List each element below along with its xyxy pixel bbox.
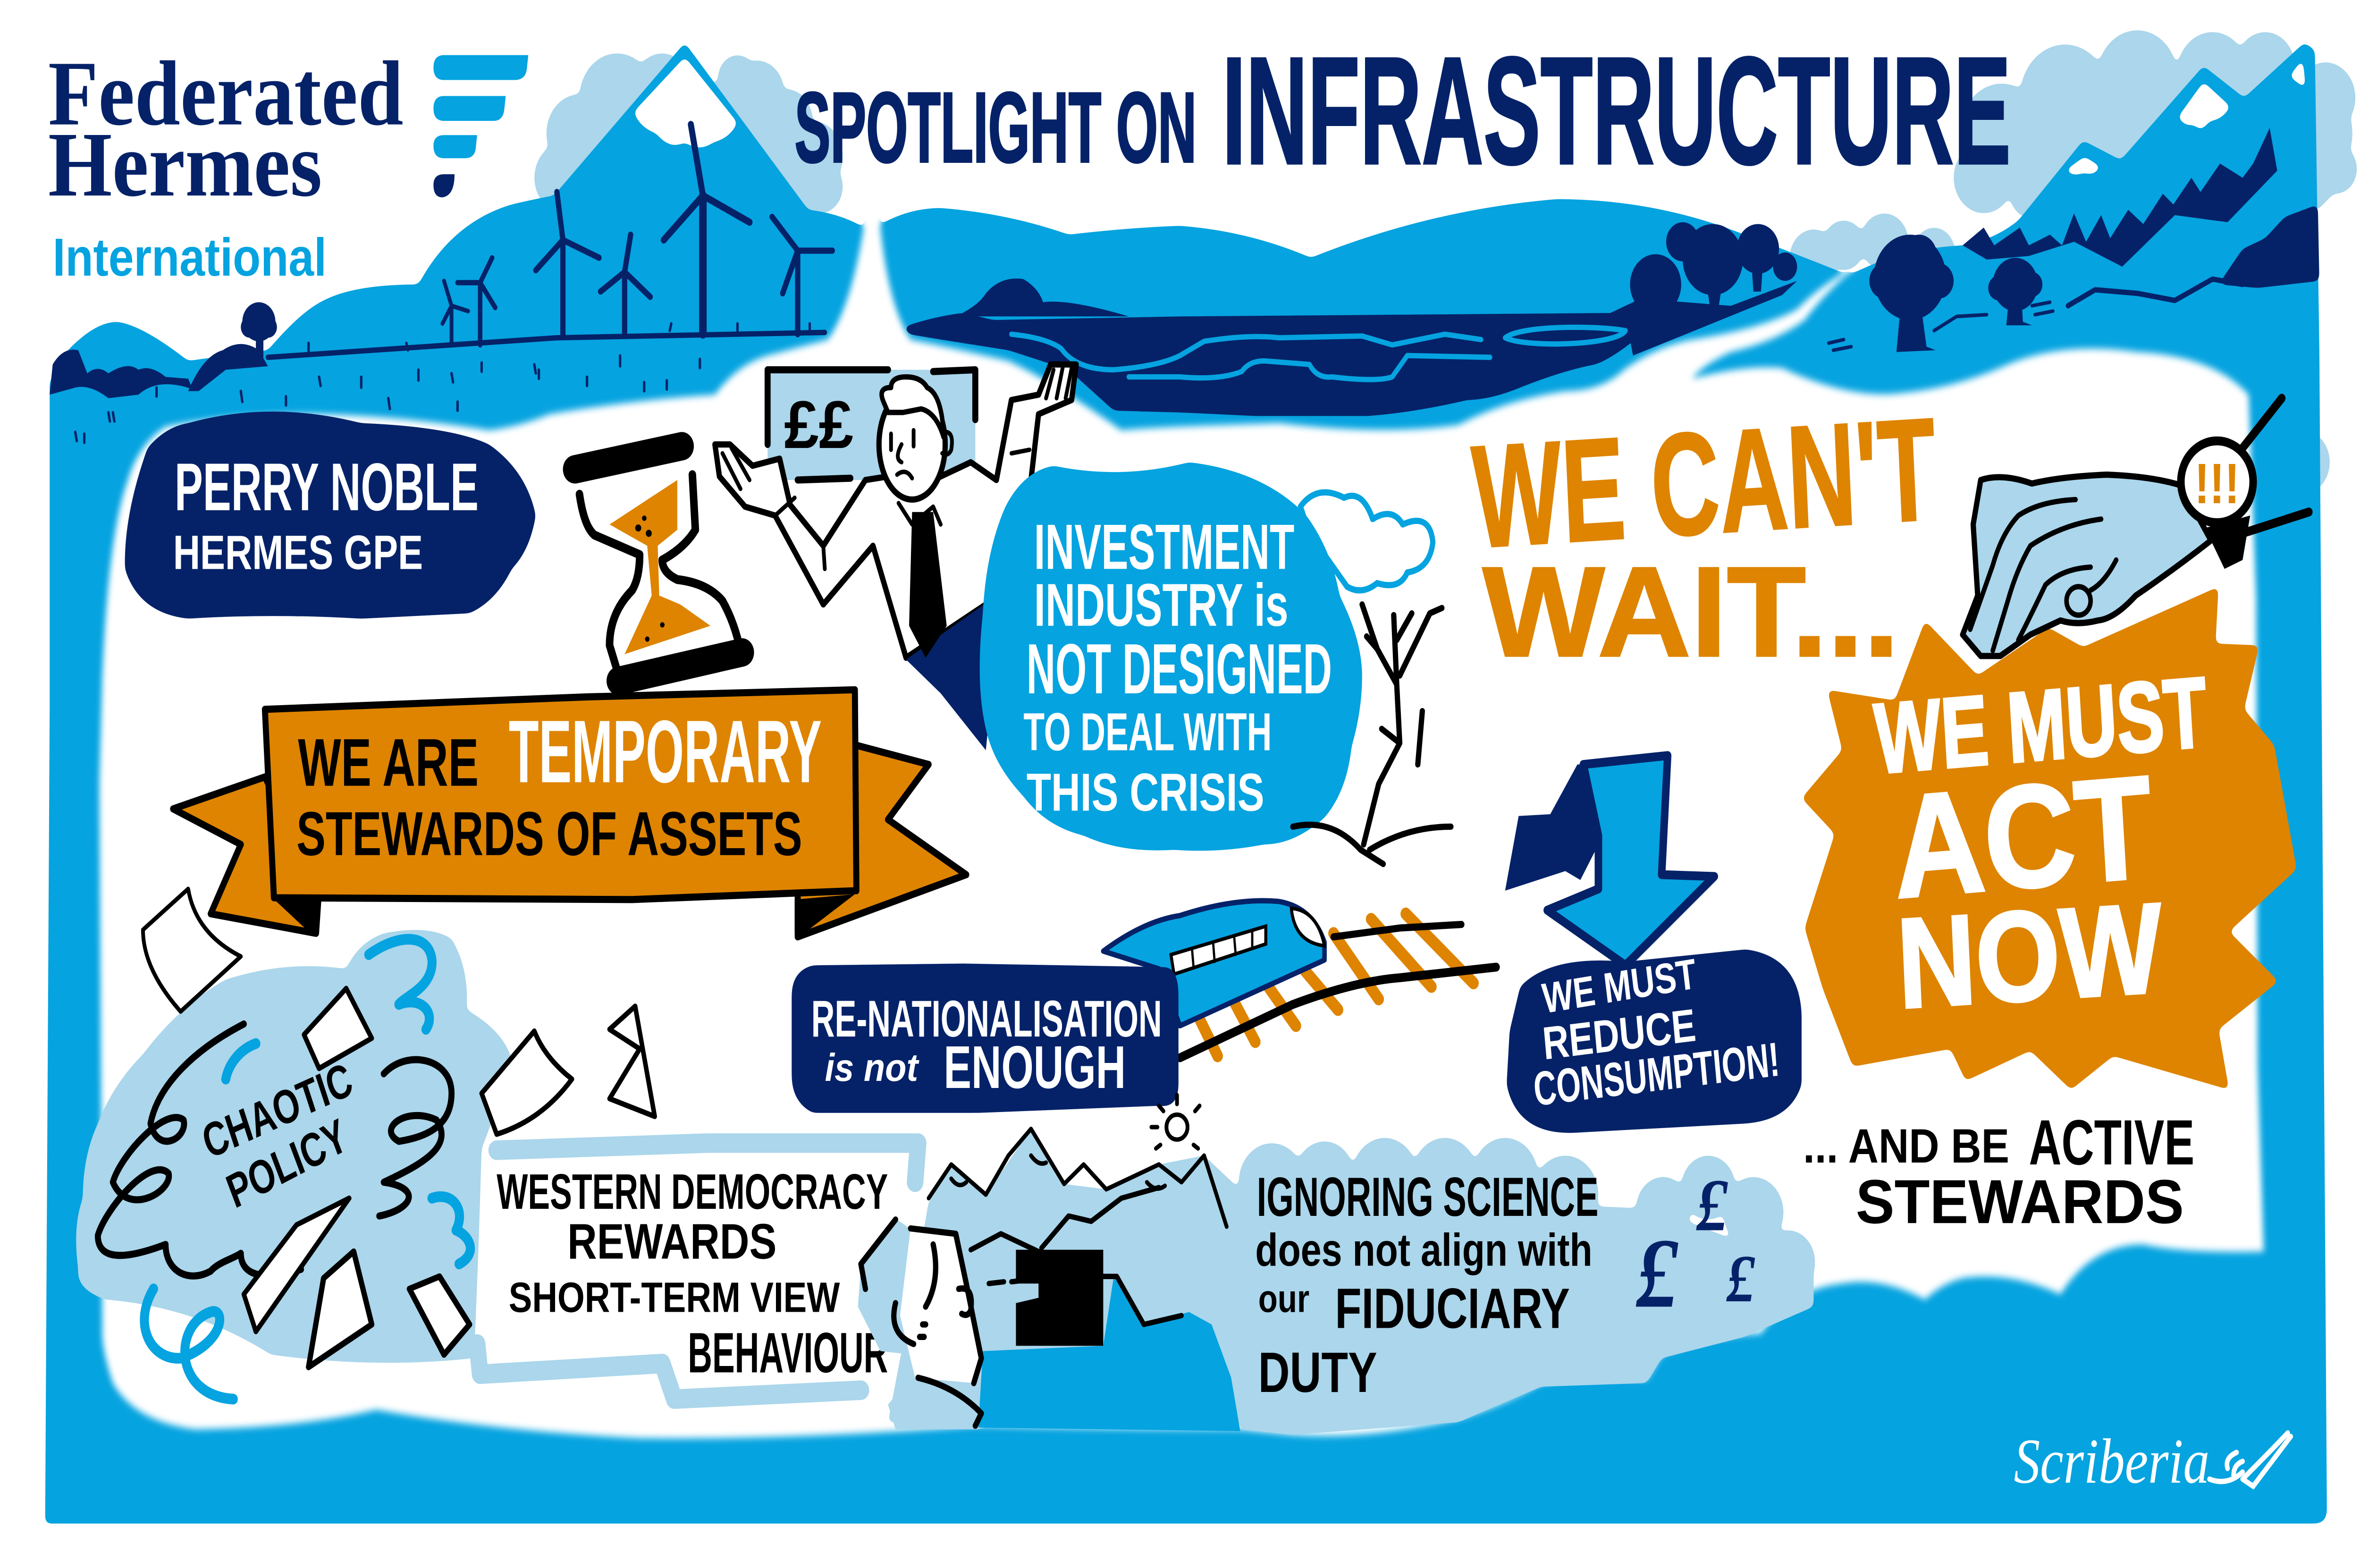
company name: Federated xyxy=(48,42,404,145)
banner tails xyxy=(173,777,319,933)
lake and trees in the central valley xyxy=(903,222,1797,416)
lake channels xyxy=(1011,327,1626,379)
panel text xyxy=(811,990,1162,1101)
bottom blue cloud edge xyxy=(2014,1426,2291,1497)
panel: reduce consumption xyxy=(1507,949,1802,1133)
text: chaotic policy xyxy=(196,1053,358,1218)
panel text xyxy=(1531,950,1782,1116)
snow caps xyxy=(633,57,2306,175)
panel text: ENOUGH xyxy=(944,1034,1126,1101)
tie xyxy=(909,512,947,658)
small outlined cloud xyxy=(1300,492,1433,590)
starburst text xyxy=(1871,657,2210,1036)
wind farm and left hills xyxy=(50,125,832,443)
icon: left hills in navy xyxy=(50,344,268,398)
icon: small tree xyxy=(1988,258,2042,325)
company name: Hermes xyxy=(48,114,322,216)
caps xyxy=(575,446,742,681)
bubble text: TO DEAL WITH xyxy=(1023,702,1272,762)
icon: lake xyxy=(903,313,1648,416)
logo xyxy=(48,42,528,287)
panel: investment industry bubble xyxy=(980,462,1433,851)
face xyxy=(891,430,952,478)
text: BEHAVIOUR xyxy=(688,1321,888,1385)
watch face xyxy=(2181,441,2253,523)
icon: large tree xyxy=(1869,235,1954,352)
icon: wind turbines xyxy=(443,125,832,345)
icon: logo mark xyxy=(433,55,528,197)
icon: hand and watch xyxy=(1963,398,2309,656)
bubble text: THIS CRISIS xyxy=(1027,763,1264,822)
train windows xyxy=(1171,909,1324,974)
text block: does not align with xyxy=(1255,1224,1593,1276)
watch strap xyxy=(2242,398,2309,533)
head xyxy=(900,1229,981,1383)
banner text line one: WE ARE xyxy=(298,725,479,801)
text: chaotic policy: CHAOTIC xyxy=(196,1053,358,1169)
heading: we can't wait: WE CAN'T xyxy=(1469,387,1939,579)
panel: chaotic policy xyxy=(76,889,655,1399)
icon: pen xyxy=(2209,1433,2291,1486)
icon: lower forest band xyxy=(2218,204,2319,288)
text: and be active stewards: STEWARDS xyxy=(1856,1167,2184,1236)
bubble text: INDUSTRY is xyxy=(1034,572,1289,639)
light blue outline xyxy=(477,1143,918,1399)
grass ticks xyxy=(75,323,810,443)
title xyxy=(795,25,2011,196)
starburst text: NOW xyxy=(1894,877,2165,1036)
panel text: REDUCE xyxy=(1541,1000,1698,1070)
icon: hourglass xyxy=(575,446,742,681)
panel text: RE-NATIONALISATION xyxy=(811,990,1162,1048)
icon: pound signs: £ xyxy=(1696,1163,1728,1247)
winding road xyxy=(2068,279,2242,306)
speaker name text: PERRY NOBLE xyxy=(175,450,479,525)
icon: board with pound signs: ££ xyxy=(784,388,853,463)
text: and be active stewards xyxy=(1803,1106,2194,1236)
banner: temporary stewards xyxy=(173,690,966,937)
ground line xyxy=(268,332,825,357)
head xyxy=(879,389,945,499)
blue squiggles xyxy=(144,939,471,1399)
shirt and arms xyxy=(715,364,1076,658)
heading: we can't wait: WAIT... xyxy=(1483,541,1899,683)
trousers xyxy=(906,596,996,750)
icon: bare tree xyxy=(1293,605,1451,864)
signature: Scriberia xyxy=(2014,1426,2209,1497)
text block xyxy=(1255,1166,1598,1404)
text: chaotic policy: POLICY xyxy=(220,1109,354,1218)
bubble text: INVESTMENT xyxy=(1034,511,1294,582)
train body xyxy=(1103,901,1324,1026)
icon: small tree xyxy=(241,302,277,359)
pale clouds behind the mountains xyxy=(534,30,2357,526)
text block: DUTY xyxy=(1258,1340,1377,1404)
icon: train on tracks xyxy=(1103,901,1496,1058)
text block: IGNORING SCIENCE xyxy=(1257,1166,1598,1228)
person with camera and mountains xyxy=(858,1095,1227,1429)
icon: pound signs: £ xyxy=(1726,1241,1755,1316)
panel: speaker name xyxy=(125,412,536,619)
hair xyxy=(858,1220,978,1429)
text: and be active stewards: ... AND BE xyxy=(1803,1120,2009,1173)
heading: we can't wait xyxy=(1469,387,1939,683)
title first part: SPOTLIGHT ON xyxy=(795,72,1197,183)
starburst text: WE MUST xyxy=(1871,657,2210,795)
camera straps xyxy=(971,1188,1181,1324)
banner: temporary stewards: TEMPORARY xyxy=(509,702,822,801)
banner text line two: STEWARDS OF ASSETS xyxy=(296,799,802,868)
icon: forest band xyxy=(1963,128,2277,267)
text: SHORT-TERM VIEW xyxy=(509,1273,840,1321)
icon: pound signs xyxy=(1635,1163,1755,1329)
panel: re-nationalisation xyxy=(792,963,1179,1113)
rails and sleepers xyxy=(1195,914,1474,1056)
arrow: reduce consumption xyxy=(1505,756,1714,965)
text: WESTERN DEMOCRACY xyxy=(497,1164,888,1220)
bubble text: NOT DESIGNED xyxy=(1027,629,1332,708)
icon: hand and watch: !!! xyxy=(2194,452,2240,515)
hair xyxy=(882,377,944,438)
text: and be active stewards: ACTIVE xyxy=(2029,1106,2194,1178)
text block: FIDUCIARY xyxy=(1335,1277,1570,1340)
panel text: is not xyxy=(825,1046,919,1089)
panel text: WE MUST xyxy=(1540,950,1699,1022)
icon: starburst act now xyxy=(1802,587,2297,1090)
icon: tree cluster xyxy=(1610,222,1797,355)
panel text: CONSUMPTION! xyxy=(1531,1032,1782,1116)
text block: our xyxy=(1258,1277,1309,1321)
shirt details xyxy=(723,368,1071,569)
mountain outlines xyxy=(928,1129,1227,1227)
flying papers xyxy=(143,889,655,1367)
text: REWARDS xyxy=(567,1214,776,1269)
icon: camera xyxy=(1016,1250,1103,1346)
bubble text xyxy=(1023,511,1332,822)
icon: sun xyxy=(1151,1095,1199,1148)
banner body xyxy=(265,690,856,900)
sand xyxy=(609,480,710,654)
icon: board with pound signs xyxy=(767,370,975,480)
text xyxy=(497,1164,888,1385)
grass strokes xyxy=(1829,302,2053,350)
panel: western democracy xyxy=(477,1143,918,1399)
speaker organisation text: HERMES GPE xyxy=(173,526,423,579)
panel: ignoring science xyxy=(888,1129,1815,1435)
starburst text: ACT xyxy=(1888,745,2157,929)
white interior page area xyxy=(99,195,2264,1438)
company name xyxy=(48,42,404,216)
company name second line: International xyxy=(53,228,327,287)
icon: bush on the far bank xyxy=(956,278,1129,316)
icon: pound signs: £ xyxy=(1635,1219,1678,1329)
right hills, forest and trees xyxy=(1829,128,2319,352)
businessman xyxy=(715,364,1076,750)
scribbled cloud outline xyxy=(98,1024,301,1276)
blue ground under camera xyxy=(978,1276,1240,1431)
